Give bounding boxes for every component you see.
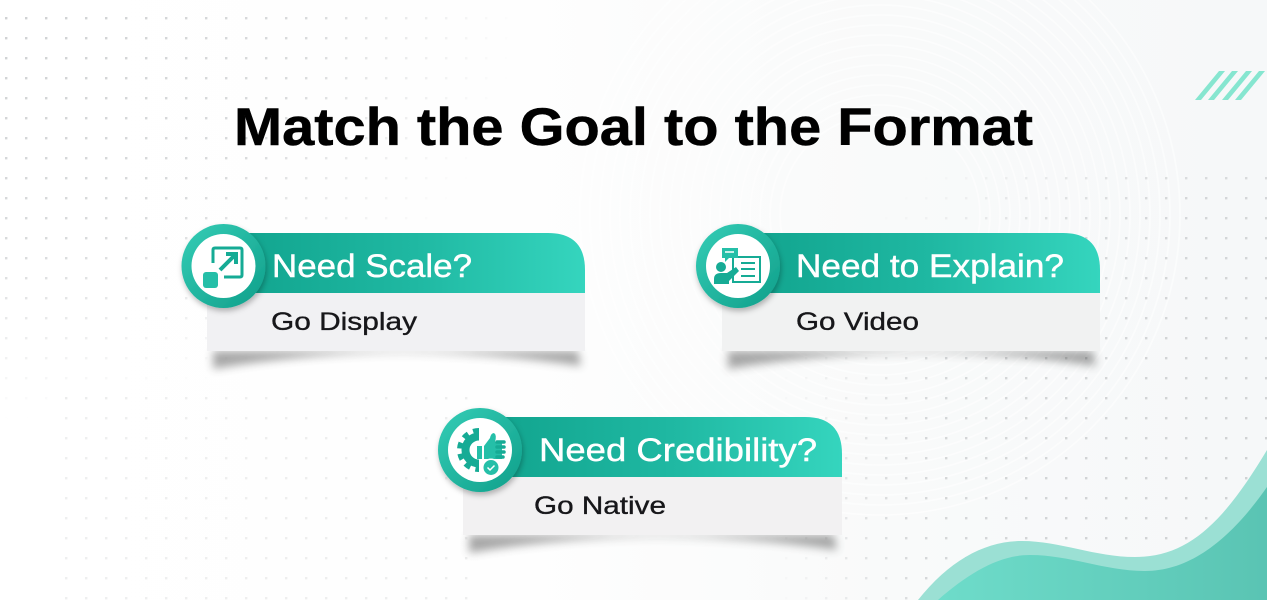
card: need credibility bbox=[438, 408, 842, 553]
decorative stripes bbox=[1195, 71, 1265, 100]
card: need scale bbox=[182, 224, 585, 369]
card: need to explain bbox=[696, 224, 1100, 369]
label: Go Native bbox=[534, 492, 666, 520]
icon: scale up bbox=[182, 224, 266, 308]
heading: Need Credibility? bbox=[539, 432, 817, 468]
label: Go Video bbox=[796, 308, 919, 336]
heading: Need Scale? bbox=[272, 248, 472, 284]
wave blob bottom right bbox=[918, 450, 1267, 600]
heading: Need to Explain? bbox=[796, 248, 1064, 284]
icon: presenter bbox=[696, 224, 780, 308]
icon: gear and thumbs up bbox=[438, 408, 522, 492]
label: Go Display bbox=[271, 308, 418, 336]
title: Match the Goal to the Format bbox=[234, 98, 1033, 157]
